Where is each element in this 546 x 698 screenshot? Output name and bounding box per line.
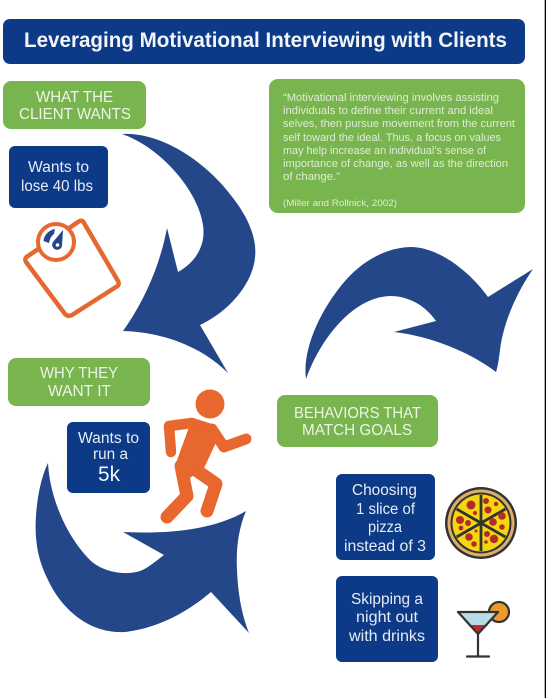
box: skipping a night out: Skipping a	[351, 591, 423, 608]
box: wants to run a 5k: run a	[93, 446, 128, 463]
icon: weighing scale	[25, 221, 119, 316]
arrow: behaviors back up to goals	[305, 247, 533, 379]
heading: behaviors that match goals	[277, 395, 438, 447]
box: skipping a night out: with drinks	[348, 628, 425, 645]
heading: what the client wants: WHAT THE	[36, 89, 113, 106]
quote panel: “Motivational interviewing involves assisting	[283, 92, 499, 104]
box: wants to lose 40 lbs: Wants to	[28, 159, 89, 176]
quote panel: of change.”	[283, 171, 340, 183]
heading: why they want it: WHY THEY	[40, 365, 118, 382]
quote panel: selves, then pursue movement from the current	[283, 118, 515, 130]
heading: behaviors that match goals: BEHAVIORS THAT	[294, 405, 422, 422]
box: wants to run a 5k: Wants to	[78, 430, 139, 447]
box: choosing 1 slice of pizza: Choosing	[352, 482, 417, 499]
box: skipping a night out: night out	[356, 609, 419, 626]
heading: why they want it: WANT IT	[48, 383, 112, 400]
box: skipping a night out	[336, 576, 438, 662]
heading: what the client wants: CLIENT WANTS	[19, 106, 131, 123]
box: choosing 1 slice of pizza: instead of 3	[344, 538, 426, 555]
heading: what the client wants	[3, 81, 146, 129]
icon: cocktail	[458, 602, 509, 656]
quote panel	[269, 79, 525, 213]
quote panel: may help increase an individual’s sense of	[283, 145, 487, 157]
box: choosing 1 slice of pizza	[336, 474, 435, 560]
box: choosing 1 slice of pizza: 1 slice of	[356, 501, 416, 518]
box: wants to run a 5k	[67, 422, 150, 493]
quote panel: individuals to define their current and ideal	[283, 105, 493, 117]
box: wants to run a 5k: 5k	[98, 463, 120, 486]
arrow: wants down to why	[122, 134, 255, 373]
box: wants to lose 40 lbs: lose 40 lbs	[21, 178, 93, 195]
quote panel: self toward the ideal. Thus, a focus on values	[283, 132, 501, 144]
icon: pizza	[445, 487, 517, 559]
box: wants to lose 40 lbs	[9, 146, 108, 208]
quote panel: (Miller and Rollnick, 2002)	[283, 198, 397, 209]
heading: behaviors that match goals: MATCH GOALS	[302, 422, 412, 439]
title banner: Leveraging Motivational Interviewing with Clients	[24, 28, 507, 52]
arrow: why to behaviors	[36, 463, 249, 633]
title banner	[3, 19, 525, 64]
icon: runner	[167, 390, 246, 517]
box: choosing 1 slice of pizza: pizza	[368, 519, 402, 536]
heading: why they want it	[8, 358, 150, 406]
quote panel: importance of change, as well as the direction	[283, 158, 508, 170]
